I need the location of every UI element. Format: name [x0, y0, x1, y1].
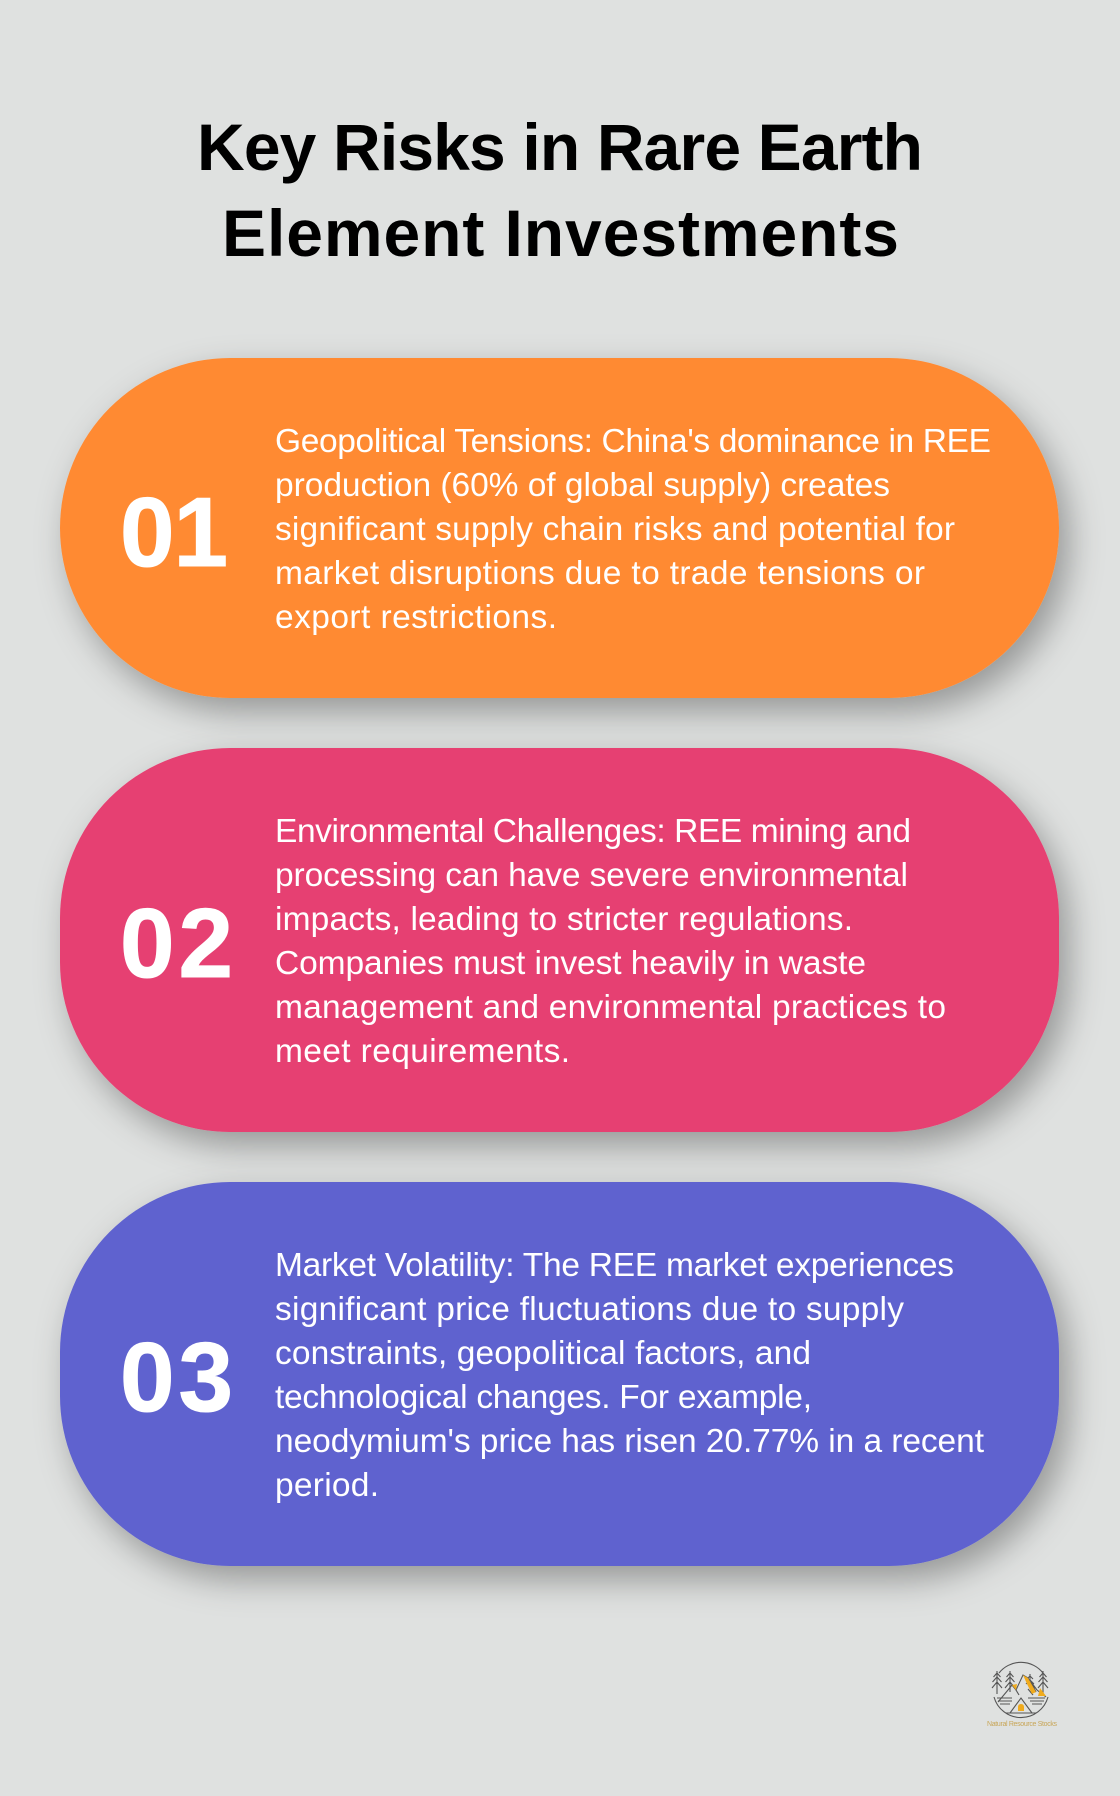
text block: environmental challenges: processing can have severe environmental	[275, 857, 908, 894]
pill background blue	[60, 1182, 1059, 1566]
text block: market volatility: significant price fluctuations due to supply	[275, 1291, 904, 1328]
text block: geopolitical tensions: significant supply chain risks and potential for	[275, 511, 955, 548]
text block: geopolitical tensions	[275, 423, 991, 636]
title: Element Investments	[222, 196, 899, 270]
logo wordmark: Natural Resource Stocks	[987, 1721, 1058, 1728]
icon: gold peaks	[1012, 1675, 1046, 1711]
title	[197, 110, 923, 270]
text block: environmental challenges: meet requirements.	[275, 1033, 570, 1070]
text block: environmental challenges: management and environmental practices to	[275, 989, 946, 1026]
text block: geopolitical tensions: production (60% of global supply) creates	[275, 467, 890, 504]
number 01: 01	[120, 477, 227, 587]
icon: mountain emblem	[992, 1662, 1048, 1718]
text block: environmental challenges: Environmental Challenges: REE mining and	[275, 813, 911, 850]
text block: geopolitical tensions: market disruptions due to trade tensions or	[275, 555, 925, 592]
text block: market volatility: technological changes. For example,	[275, 1379, 812, 1416]
text block: market volatility: period.	[275, 1467, 379, 1504]
panel: environmental challenges	[60, 748, 1059, 1132]
number 03: 03	[120, 1322, 237, 1432]
text block: environmental challenges	[275, 813, 946, 1070]
panel: geopolitical tensions	[60, 358, 1059, 698]
title: Key Risks in Rare Earth	[197, 110, 923, 184]
logo: natural resource stocks	[987, 1662, 1058, 1728]
text block: market volatility: Market Volatility: The REE market experiences	[275, 1247, 954, 1284]
pill background pink	[60, 748, 1059, 1132]
text block: market volatility: neodymium's price has risen 20.77% in a recent	[275, 1423, 985, 1460]
text block: environmental challenges: Companies must invest heavily in waste	[275, 945, 866, 982]
text block: geopolitical tensions: export restrictions.	[275, 599, 557, 636]
text block: environmental challenges: impacts, leading to stricter regulations.	[275, 901, 853, 938]
pill background orange	[60, 358, 1059, 698]
text block: market volatility: constraints, geopolitical factors, and	[275, 1335, 811, 1372]
text block: market volatility	[275, 1247, 985, 1504]
panel: market volatility	[60, 1182, 1059, 1566]
number 02: 02	[120, 888, 237, 998]
text block: geopolitical tensions: Geopolitical Tensions: China's dominance in REE	[275, 423, 991, 460]
